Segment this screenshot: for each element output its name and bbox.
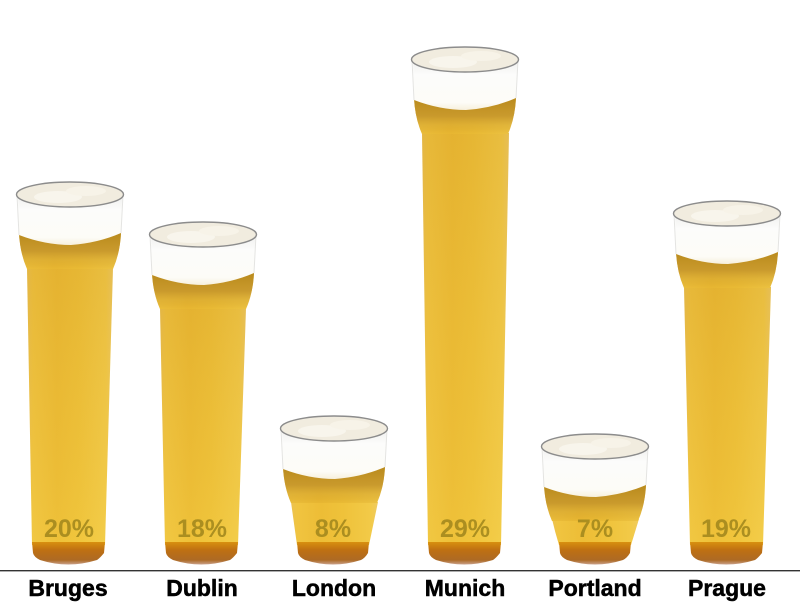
sediment <box>559 542 631 564</box>
glass: Munich 29% <box>412 47 518 564</box>
city labels: Portland <box>548 575 642 601</box>
label: 18%: 18% <box>177 515 227 543</box>
city labels: Munich <box>425 575 505 601</box>
beer body <box>160 308 246 545</box>
body shade <box>160 308 246 545</box>
baseline axis <box>0 570 800 571</box>
glass: Bruges 20% <box>16 182 124 564</box>
sediment <box>165 542 238 564</box>
glass head <box>16 182 124 269</box>
glass head <box>412 47 518 134</box>
city labels: Dublin <box>166 575 238 601</box>
glass head <box>674 201 780 288</box>
label: 29%: 29% <box>440 515 490 543</box>
sediment <box>428 542 501 564</box>
glass: Portland 7% <box>542 434 648 564</box>
glass head <box>542 434 648 521</box>
beer body <box>422 133 509 545</box>
glass head <box>150 222 256 309</box>
body shade <box>684 287 771 545</box>
beer body <box>27 268 113 545</box>
beer body <box>684 287 771 545</box>
city labels <box>28 575 766 601</box>
beer body <box>552 519 639 545</box>
glass: Prague 19% <box>674 201 780 564</box>
glass: London 8% <box>280 416 388 564</box>
label: 7%: 7% <box>577 515 613 543</box>
label: 8%: 8% <box>315 515 351 543</box>
label: 20%: 20% <box>44 515 94 543</box>
glass: Dublin 18% <box>150 222 256 564</box>
city labels: London <box>292 575 376 601</box>
beer body <box>291 502 378 545</box>
body shade <box>422 133 509 545</box>
city labels: Prague <box>688 575 766 601</box>
glass head <box>280 416 388 503</box>
body shade <box>27 268 113 545</box>
city labels: Bruges <box>28 575 108 601</box>
sediment <box>32 542 105 564</box>
label: 19%: 19% <box>701 515 751 543</box>
sediment <box>690 542 763 564</box>
sediment <box>297 542 369 564</box>
